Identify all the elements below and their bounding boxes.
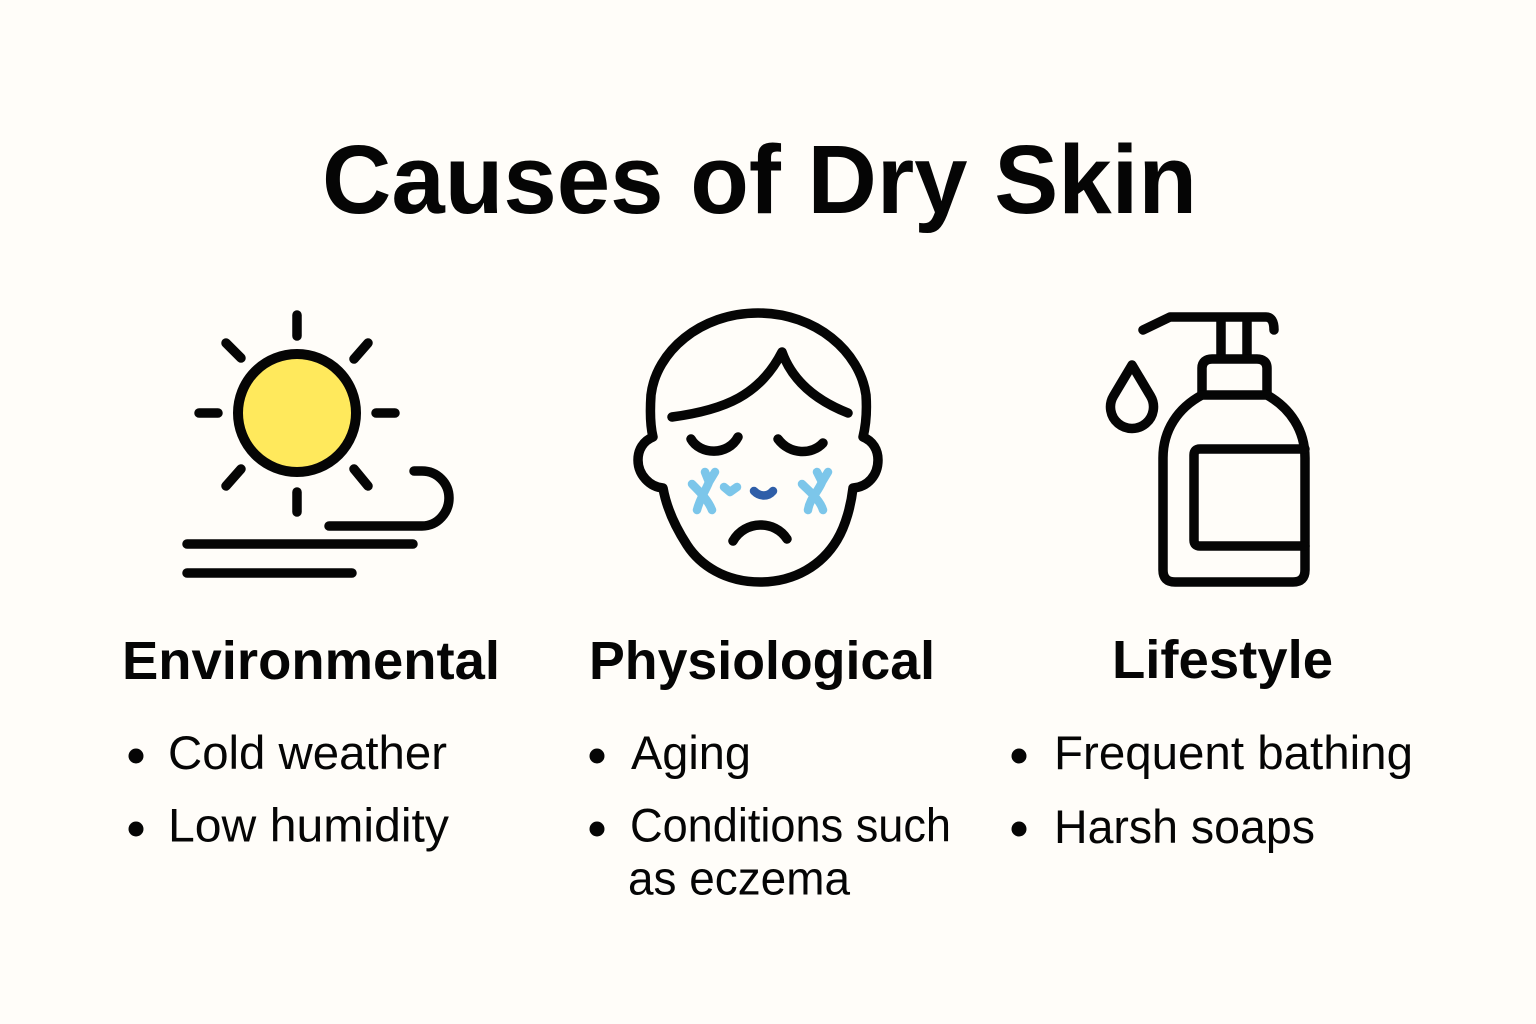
heading: lifestyle: Lifestyle — [1112, 630, 1333, 690]
list: physiological causes — [590, 726, 951, 904]
list: physiological causes: Aging — [631, 726, 751, 779]
head outline — [638, 313, 878, 582]
frown — [733, 525, 787, 541]
small cheek tick — [724, 487, 737, 492]
closed eyes — [691, 437, 823, 452]
panel: physiological — [589, 313, 951, 904]
list: environmental causes: Cold weather — [168, 726, 447, 779]
hair line — [672, 352, 848, 417]
bottle body — [1163, 395, 1305, 582]
soap drop — [1110, 365, 1154, 428]
list: physiological causes: as eczema — [628, 852, 851, 904]
sun rays — [199, 315, 395, 512]
list: lifestyle causes: Harsh soaps — [1054, 800, 1315, 853]
panel: lifestyle — [1012, 317, 1413, 853]
list: environmental causes: Low humidity — [168, 798, 450, 852]
nose — [754, 491, 773, 496]
list: lifestyle causes — [1012, 726, 1413, 853]
heading: environmental: Environmental — [122, 631, 500, 691]
heading: physiological: Physiological — [589, 631, 935, 691]
right cheek mark — [802, 472, 828, 510]
icon: soap pump bottle — [1110, 317, 1305, 582]
title: Causes of Dry Skin — [322, 125, 1197, 234]
wind lines — [187, 471, 449, 573]
panel: environmental — [122, 315, 500, 852]
left cheek mark — [692, 472, 715, 510]
pump spout — [1143, 317, 1274, 358]
icon: sad face with dry cheeks — [638, 313, 878, 582]
pump collar — [1202, 359, 1267, 395]
icon: sun and wind — [187, 315, 449, 573]
bottle label — [1194, 449, 1305, 546]
list: environmental causes — [128, 726, 450, 852]
list: physiological causes: Conditions such — [630, 798, 951, 852]
sun disc — [238, 354, 356, 472]
list: lifestyle causes: Frequent bathing — [1054, 726, 1413, 779]
